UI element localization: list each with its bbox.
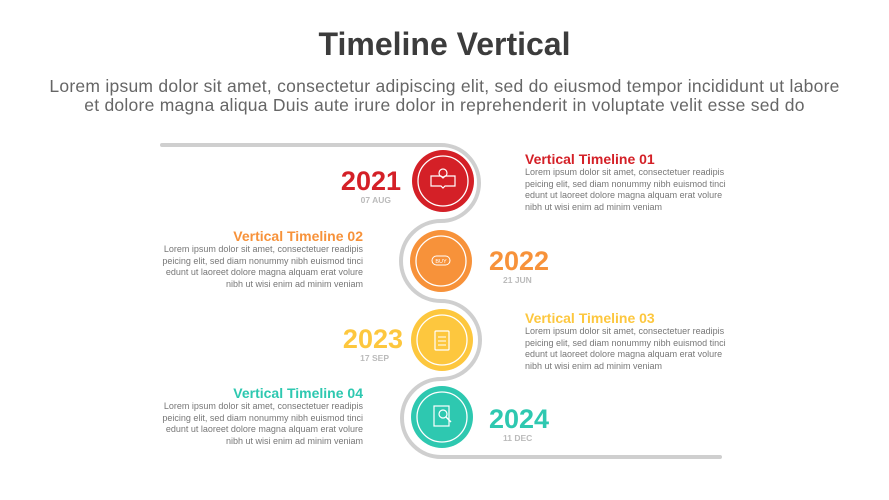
year 2023: 17 SEP (360, 353, 389, 363)
text 02 (162, 228, 363, 289)
icon: circle 3 clipboard (411, 309, 473, 371)
text 02: Lorem ipsum dolor sit amet, consectetuer readipis (164, 244, 363, 254)
text 04: peicing elit, sed diam nonummy nibh euismod tinci (162, 413, 363, 423)
icon: circle 1 book (412, 150, 474, 212)
text 04: nibh ut wisi enim ad minim veniam (226, 436, 363, 446)
year 2021: 2021 (341, 166, 401, 196)
year 2023: 2023 (343, 324, 403, 354)
title: Timeline Vertical (318, 26, 570, 62)
year 2024: 2024 (489, 404, 549, 434)
year 2022: 2022 (489, 246, 549, 276)
track (162, 145, 720, 457)
year 2022: 21 JUN (503, 275, 532, 285)
text 04: edunt ut laoreet dolore magna alquam erat volure (166, 424, 363, 434)
year 2024: 11 DEC (503, 433, 532, 443)
text 03: Lorem ipsum dolor sit amet, consectetuer readipis (525, 326, 724, 336)
text 03 (525, 310, 726, 371)
text 04: Lorem ipsum dolor sit amet, consectetuer readipis (164, 401, 363, 411)
text 01 (525, 151, 726, 212)
text 02: nibh ut wisi enim ad minim veniam (226, 279, 363, 289)
subtitle (49, 76, 840, 115)
text 02: edunt ut laoreet dolore magna alquam erat volure (166, 267, 363, 277)
text 03: peicing elit, sed diam nonummy nibh euismod tinci (525, 338, 726, 348)
text 04: Vertical Timeline 04 (233, 385, 363, 401)
text 04 (162, 385, 363, 446)
icon: circle 2 buy (410, 230, 472, 292)
subtitle: et dolore magna aliqua Duis aute irure dolor in reprehenderit in voluptate velit esse sed do (84, 95, 805, 115)
text 03: nibh ut wisi enim ad minim veniam (525, 361, 662, 371)
text 01: nibh ut wisi enim ad minim veniam (525, 202, 662, 212)
text 01: peicing elit, sed diam nonummy nibh euismod tinci (525, 179, 726, 189)
text 03: Vertical Timeline 03 (525, 310, 655, 326)
subtitle: Lorem ipsum dolor sit amet, consectetur adipiscing elit, sed do eiusmod tempor incididunt ut labore (49, 76, 840, 96)
icon: circle 4 search doc (411, 386, 473, 448)
text 01: edunt ut laoreet dolore magna alquam erat volure (525, 190, 722, 200)
text 01: Vertical Timeline 01 (525, 151, 655, 167)
year 2021: 07 AUG (361, 195, 391, 205)
icon: circle 2 buy: BUY (435, 259, 447, 265)
text 02: Vertical Timeline 02 (233, 228, 363, 244)
text 02: peicing elit, sed diam nonummy nibh euismod tinci (162, 256, 363, 266)
text 01: Lorem ipsum dolor sit amet, consectetuer readipis (525, 167, 724, 177)
text 03: edunt ut laoreet dolore magna alquam erat volure (525, 349, 722, 359)
